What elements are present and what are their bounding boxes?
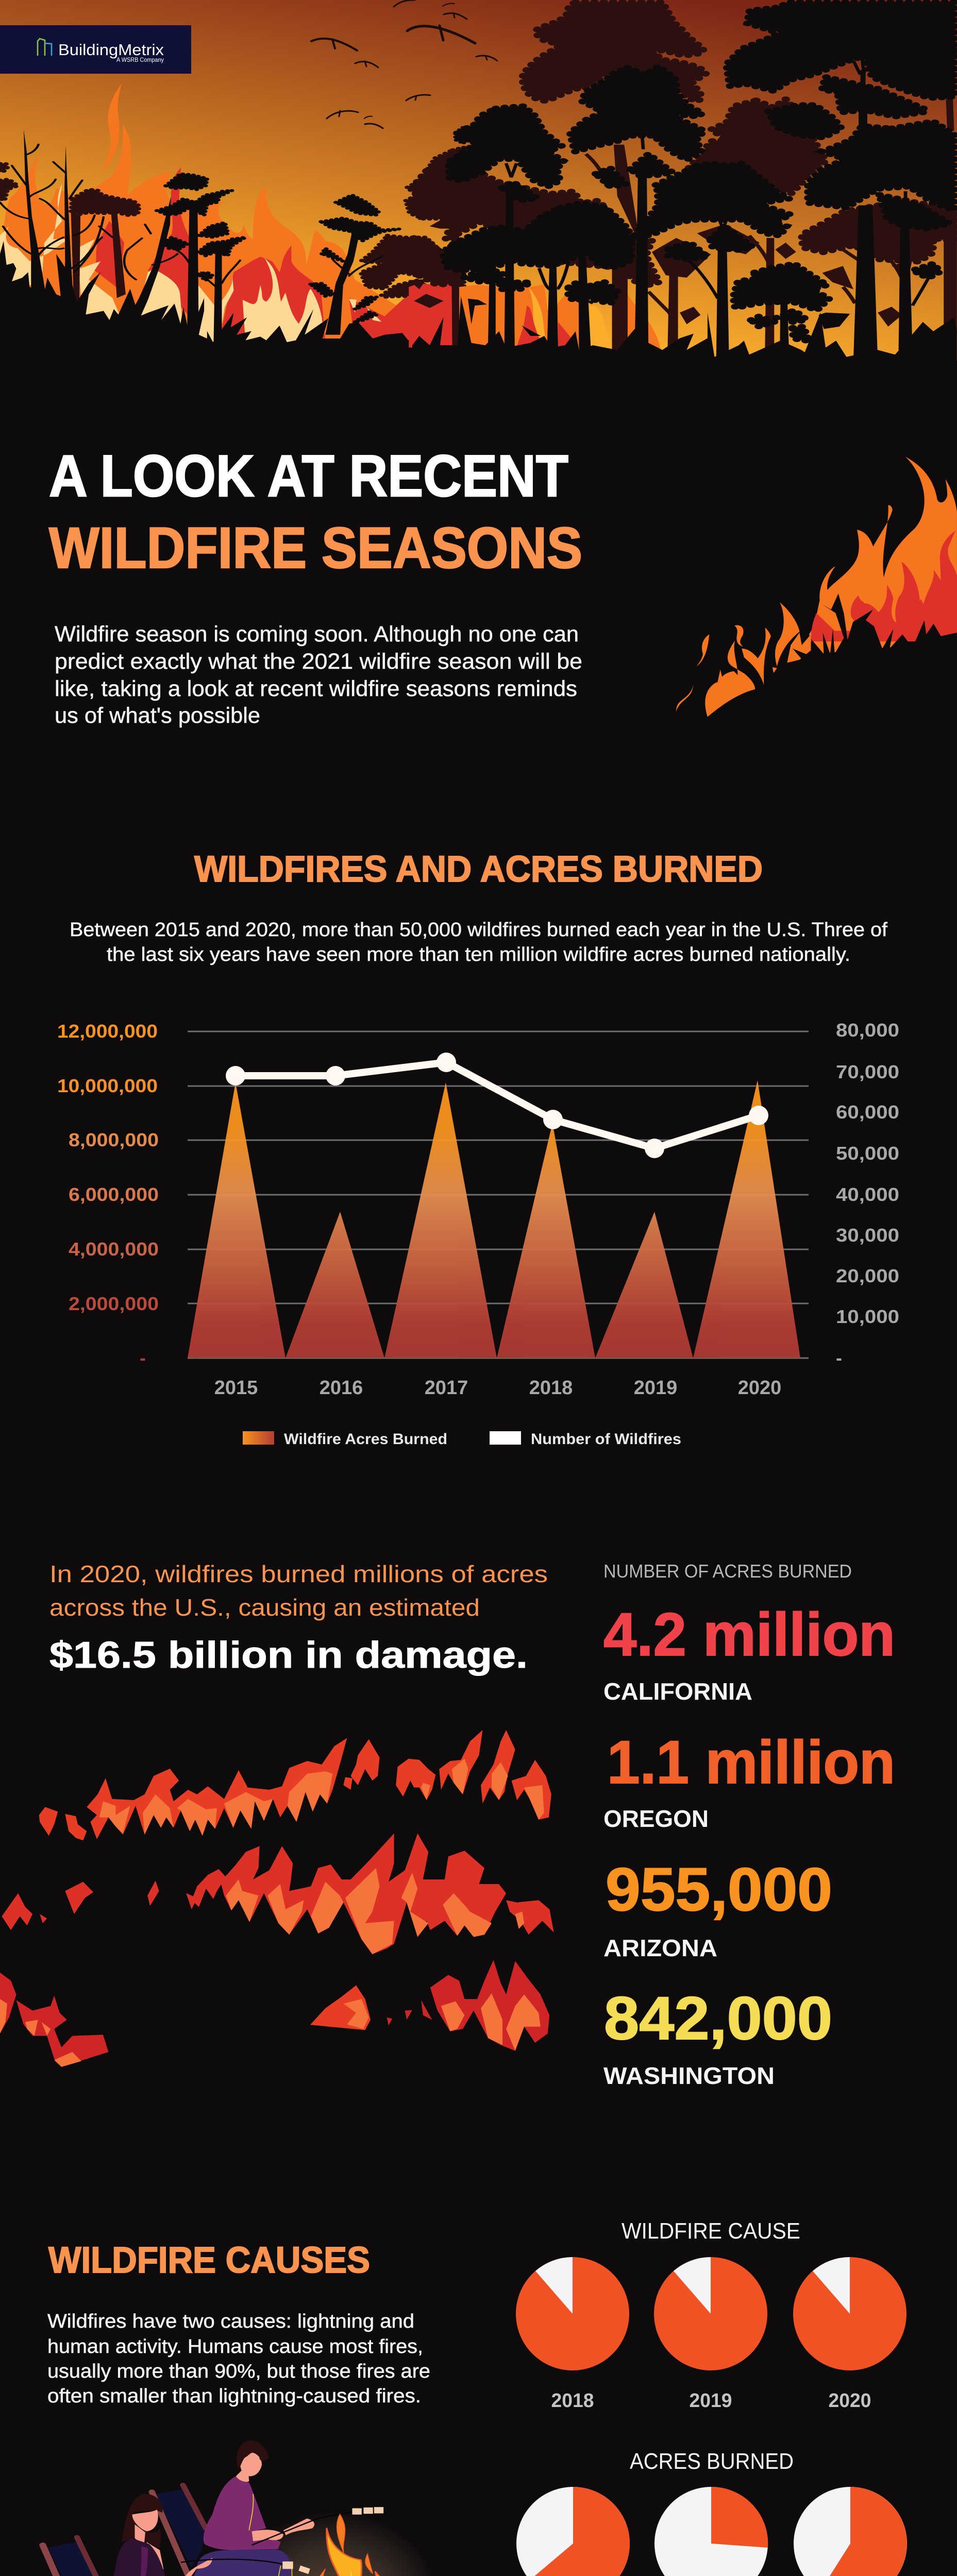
front chair <box>43 2537 157 2576</box>
right axis labels: 40,000 <box>836 1184 899 1205</box>
red flame mass <box>811 531 957 641</box>
pie charts: wildfire cause: WILDFIRE CAUSE <box>622 2218 800 2244</box>
left axis labels: 2,000,000 <box>69 1293 159 1314</box>
right axis labels: 70,000 <box>836 1061 899 1082</box>
left axis labels: 6,000,000 <box>69 1184 159 1205</box>
year labels: 2016 <box>320 1377 363 1399</box>
chart legend: Wildfire Acres Burned <box>284 1431 447 1448</box>
logo: A WSRB Company <box>116 56 164 63</box>
right axis labels: - <box>836 1347 842 1368</box>
section heading: wildfire causes: WILDFIRE CAUSES <box>48 2240 370 2281</box>
pie year labels: 2019 <box>690 2390 732 2412</box>
intro text: like, taking a look at recent wildfire seasons reminds <box>55 676 577 701</box>
pie: 2019 cause <box>654 2257 767 2370</box>
year labels: 2019 <box>634 1377 677 1399</box>
orange flame mass <box>809 456 957 654</box>
number of acres burned by state: NUMBER OF ACRES BURNED <box>603 1561 852 1582</box>
pie year labels: 2020 <box>829 2390 871 2412</box>
causes text: human activity. Humans cause most fires, <box>47 2336 423 2358</box>
section heading: wildfires and acres burned: WILDFIRES AND ACRES BURNED <box>194 849 763 890</box>
illustration: flames on hillside <box>676 456 957 730</box>
year labels: 2015 <box>214 1377 258 1399</box>
left flames and trees <box>0 83 464 366</box>
intro text: predict exactly what the 2021 wildfire season will be <box>55 649 582 674</box>
crown shapes: black foreground trees <box>444 3 954 341</box>
intro text: us of what's possible <box>55 703 260 728</box>
causes text <box>47 2311 430 2407</box>
campfire glow <box>226 2511 441 2576</box>
pie year labels: 2018 <box>551 2390 594 2412</box>
sky gradient <box>0 0 957 361</box>
number of wildfires line <box>226 1053 768 1158</box>
damage statement: In 2020, wildfires burned millions of acres <box>49 1561 548 1587</box>
damage statement: across the U.S., causing an estimated <box>49 1594 480 1621</box>
flame band middle <box>2 1834 554 1954</box>
stat: arizona <box>603 1856 832 1961</box>
back chair <box>152 2485 255 2576</box>
causes text: Wildfires have two causes: lightning and <box>47 2311 414 2332</box>
pie: 2020 cause <box>793 2257 906 2370</box>
chart legend: Number of Wildfires <box>531 1431 681 1448</box>
flame band bottom <box>0 1960 549 2067</box>
right axis labels: 80,000 <box>836 1020 899 1041</box>
hillside with grass <box>708 594 957 730</box>
left axis labels: 10,000,000 <box>57 1075 158 1096</box>
pie: 2018 cause <box>516 2257 629 2370</box>
stat: california: 4.2 million <box>603 1601 895 1669</box>
left axis labels: 4,000,000 <box>69 1239 159 1260</box>
woman seated <box>94 2494 244 2576</box>
stat: california: CALIFORNIA <box>603 1678 752 1705</box>
year labels: 2020 <box>738 1377 781 1399</box>
grass and hillside, left <box>0 241 464 366</box>
grass and ground, right <box>412 296 957 373</box>
combo chart: acres burned and number of wildfires <box>57 1020 899 1448</box>
birds <box>311 0 497 128</box>
left axis labels: 12,000,000 <box>57 1021 158 1042</box>
stat: washington <box>603 1985 832 2089</box>
pie: 2019 acres <box>654 2487 768 2576</box>
right axis labels: 50,000 <box>836 1143 899 1164</box>
stat: oregon: OREGON <box>603 1805 709 1832</box>
number of acres burned by state <box>603 1561 895 2089</box>
year labels: 2017 <box>425 1377 468 1399</box>
chart legend <box>243 1431 681 1448</box>
stat: washington: 842,000 <box>604 1985 832 2053</box>
left axis labels <box>57 1021 159 1368</box>
logo icon: building <box>38 39 52 56</box>
left axis labels: - <box>140 1347 146 1368</box>
lower flame tongues <box>676 602 811 717</box>
stat: arizona: ARIZONA <box>603 1935 717 1961</box>
logo <box>0 25 191 74</box>
illustration: couple at campfire <box>43 2441 441 2576</box>
stat: arizona: 955,000 <box>606 1856 832 1924</box>
year labels: 2018 <box>529 1377 573 1399</box>
pie: 2020 acres <box>794 2487 907 2576</box>
title: A LOOK AT RECENT <box>49 444 568 509</box>
pie charts: acres burned: ACRES BURNED <box>630 2449 794 2474</box>
intro text: Wildfire season is coming soon. Although no one can <box>55 622 579 647</box>
intro text <box>55 622 582 728</box>
year labels <box>214 1377 781 1399</box>
pie charts: acres burned <box>516 2449 907 2576</box>
damage statement <box>49 1561 548 1676</box>
right axis labels: 20,000 <box>836 1265 899 1286</box>
right axis labels: 60,000 <box>836 1101 899 1123</box>
logo: BuildingMetrix <box>58 41 164 59</box>
right axis labels: 30,000 <box>836 1225 899 1246</box>
causes text: usually more than 90%, but those fires are <box>47 2361 430 2382</box>
section intro text <box>70 919 887 965</box>
right axis labels: 10,000 <box>836 1306 899 1327</box>
pie: 2018 acres <box>516 2487 630 2576</box>
fire flames <box>281 2514 400 2576</box>
section intro text: Between 2015 and 2020, more than 50,000 wildfires burned each year in the U.S. Three of <box>70 919 887 941</box>
hero illustration: burning forest <box>0 0 957 373</box>
man seated <box>194 2441 314 2576</box>
right flames and trees <box>409 3 957 373</box>
causes text: often smaller than lightning-caused fires. <box>47 2385 421 2407</box>
pie charts: wildfire cause <box>516 2218 906 2412</box>
right axis labels <box>836 1020 899 1368</box>
left axis labels: 8,000,000 <box>69 1129 159 1150</box>
title <box>49 444 582 580</box>
stat: washington: WASHINGTON <box>603 2062 775 2089</box>
damage statement: $16.5 billion in damage. <box>49 1635 528 1676</box>
flame band top <box>39 1730 551 1840</box>
pie year labels <box>551 2390 871 2412</box>
stat: oregon: 1.1 million <box>607 1728 895 1797</box>
acres burned triangles <box>188 1080 800 1358</box>
roasting sticks and marshmallows <box>181 2507 383 2574</box>
illustration: flame bands <box>0 1730 554 2067</box>
stat: oregon <box>603 1728 895 1832</box>
title: WILDFIRE SEASONS <box>49 516 582 580</box>
section intro text: the last six years have seen more than ten million wildfire acres burned nationally. <box>107 944 850 965</box>
stat: california <box>603 1601 895 1705</box>
